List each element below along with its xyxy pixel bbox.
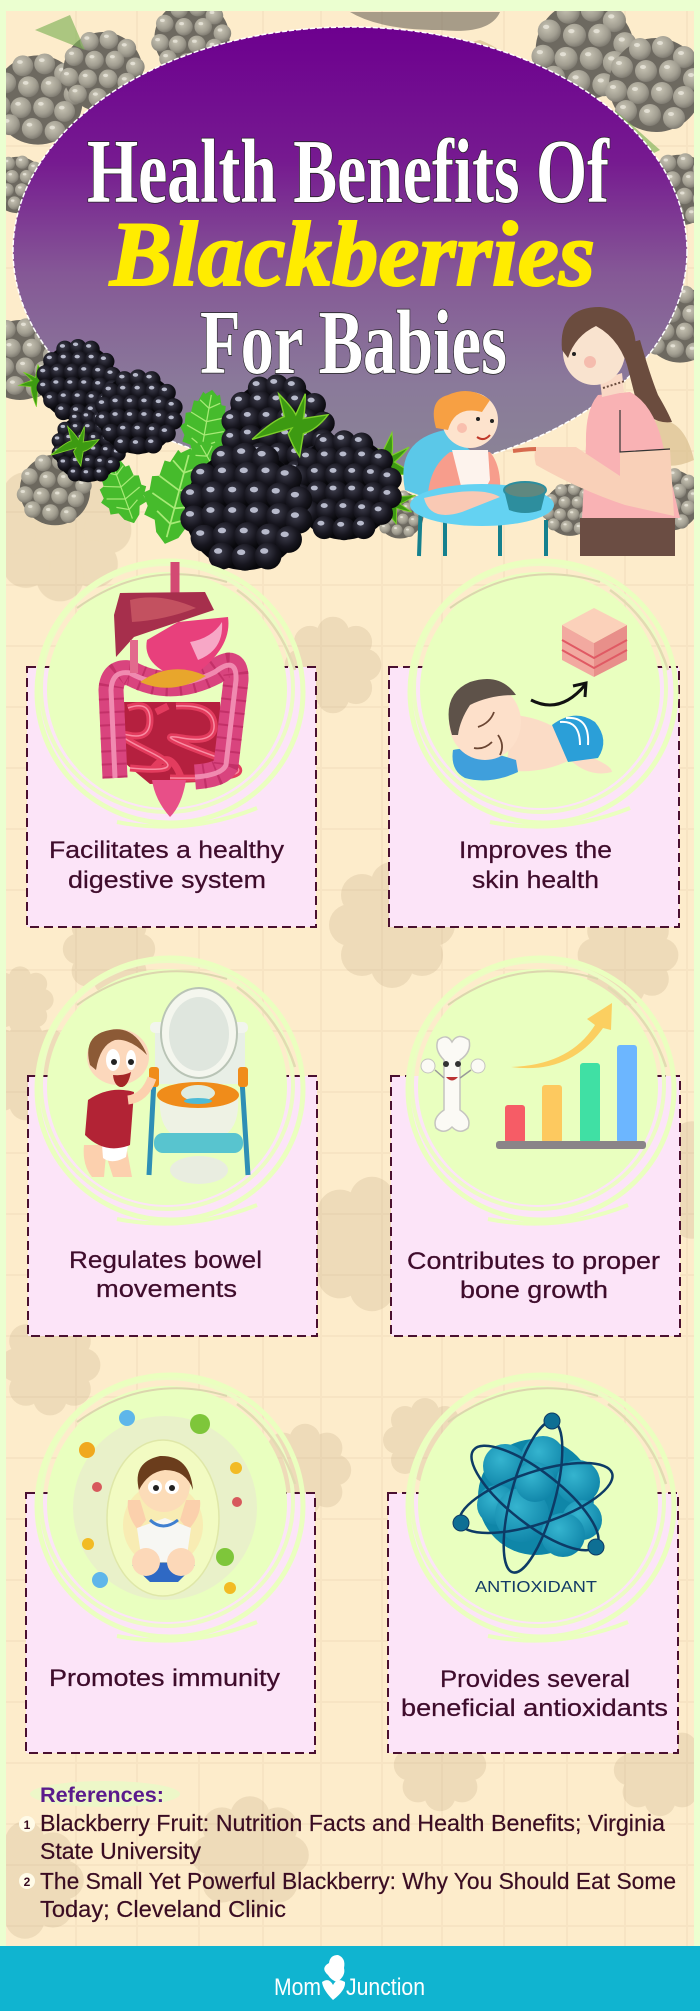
blackberries left cluster and centre cluster [14,339,424,571]
title: Blackberries [109,203,595,305]
label: digestive system [68,867,266,894]
references: Today; Cleveland Clinic [40,1896,286,1922]
circle backdrop [37,1375,303,1641]
label [459,837,612,894]
panel: benefit digestive [27,561,316,927]
circle backdrop [410,561,676,827]
icon: toddler and potty seat [84,988,248,1184]
label: Provides several [440,1666,630,1693]
circle backdrop [408,958,674,1224]
title [87,121,610,393]
references: 2 [24,1875,31,1889]
references: State University [40,1838,201,1864]
circle backdrop [37,958,303,1224]
references: 1 [24,1818,31,1832]
label: Regulates bowel [69,1247,262,1274]
panel: benefit bowel [28,958,317,1336]
label: Promotes immunity [49,1665,280,1692]
label: beneficial antioxidants [401,1695,668,1722]
card [27,667,316,927]
label: bone growth [460,1277,608,1304]
logo: Mom [274,1974,321,2001]
icon: digestive system [111,562,239,817]
label: movements [96,1276,237,1303]
icon: sleeping baby and skin layers [449,608,627,780]
references: The Small Yet Powerful Blackberry: Why You Should Eat Some [40,1868,676,1894]
card [388,1493,678,1753]
label: skin health [472,867,599,894]
label: Improves the [459,837,612,864]
label [49,837,284,894]
panel: benefit antioxidants [388,1375,678,1753]
label: Facilitates a healthy [49,837,284,864]
label: Contributes to proper [407,1248,660,1275]
icon: antioxidant molecule [452,1413,620,1596]
card [391,1076,680,1336]
card [28,1076,317,1336]
footer band [0,1946,700,2011]
title: For Babies [200,292,507,393]
references [19,1781,676,1922]
logo: Junction [346,1974,425,2001]
panel: title ellipse [13,27,687,475]
label [401,1666,668,1722]
panel: benefit skin [389,561,679,927]
panel: benefit bone growth [391,958,680,1336]
circle backdrop [408,1375,674,1641]
label [407,1248,660,1304]
icon: antioxidant molecule: ANTIOXIDANT [475,1579,597,1596]
logo [274,1955,425,2001]
illustration: mother feeding with spoon [513,307,680,556]
card [389,667,679,927]
circle backdrop [37,561,303,827]
illustration: baby in high chair [403,391,554,556]
icon: protected baby and germs [73,1410,257,1600]
icon: bone and bar chart [421,1003,646,1149]
panel: benefit immunity [26,1375,315,1753]
label [69,1247,262,1303]
card [26,1493,315,1753]
references: References: [40,1784,164,1807]
references: Blackberry Fruit: Nutrition Facts and Health Benefits; Virginia [40,1810,665,1836]
